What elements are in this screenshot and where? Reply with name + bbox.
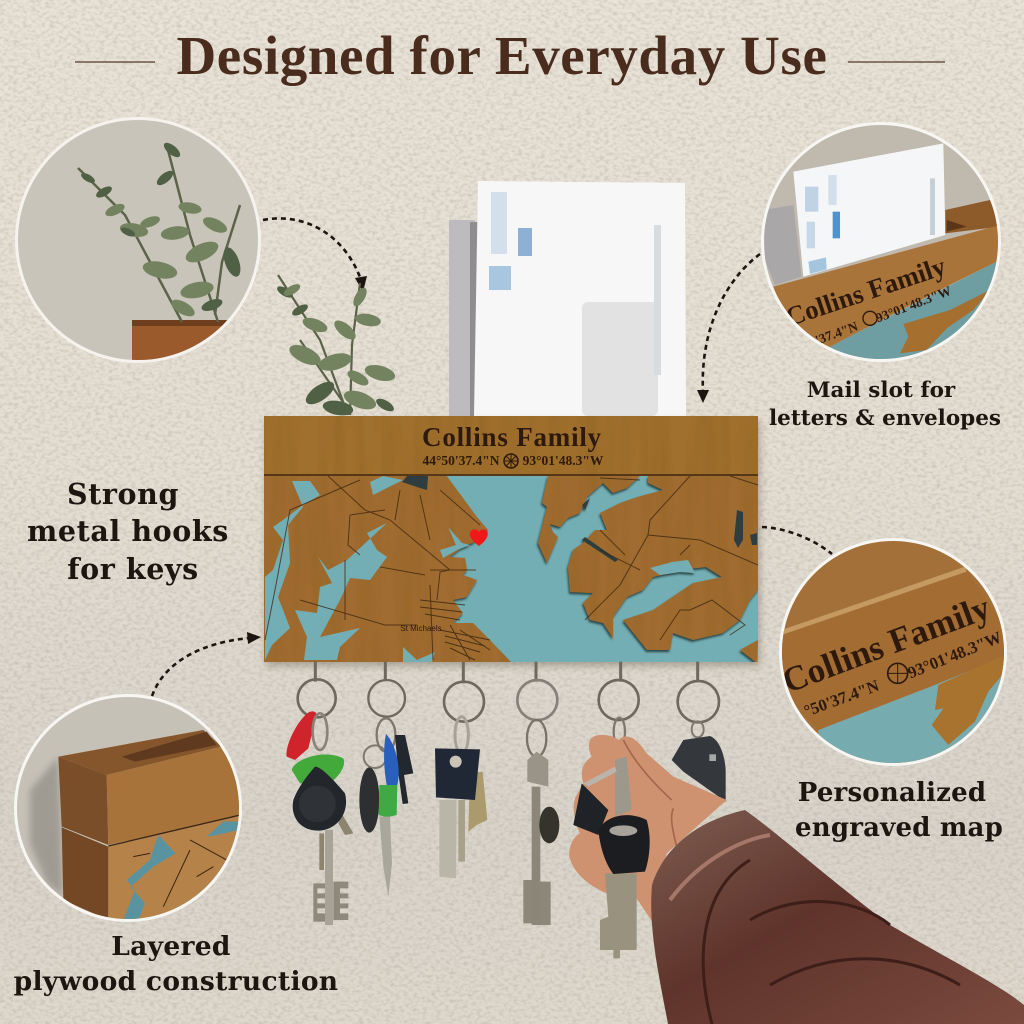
engraved name: detail: Collins Family <box>777 587 996 701</box>
title: Designed for Everyday Use <box>176 25 828 86</box>
panel: plywood detail circle <box>10 690 250 925</box>
engraved coordinates: 93°01'48.3"W <box>523 453 604 468</box>
engraved coordinates <box>422 453 604 468</box>
land and inlets <box>264 475 758 663</box>
engraved coordinates: detail: 93°01'48.3"W <box>905 627 1005 682</box>
panel: mail slot detail circle <box>760 120 1010 370</box>
engraved coordinates: mail slot <box>807 283 954 350</box>
hand holding keys <box>569 735 727 958</box>
panel: plant detail circle <box>15 117 261 363</box>
engraved coordinates: mail slot: 0'37.4"N <box>807 318 860 350</box>
panel: engraved map detail circle <box>775 535 1015 770</box>
arrow: hooks callout <box>152 632 261 696</box>
plant on wall <box>275 275 397 418</box>
label: metal hooks: metal hooks <box>27 514 229 548</box>
engraved coordinates: 44°50'37.4"N <box>422 453 500 468</box>
town label: St Michaels <box>400 624 442 633</box>
label: engraved map: Personalized <box>798 778 986 808</box>
key ring group 5 rings <box>599 662 639 746</box>
key ring group 4 <box>517 662 559 925</box>
engraved family name: Collins Family <box>422 422 602 452</box>
label: metal hooks: for keys <box>67 552 199 586</box>
label: metal hooks: Strong <box>67 477 179 511</box>
envelopes <box>449 181 686 417</box>
key ring group 2 <box>359 662 413 897</box>
icon: red heart pin <box>470 529 488 546</box>
arrow: engraved map callout <box>762 527 832 554</box>
wood header <box>264 416 758 476</box>
engraved name: mail slot: Collins Family <box>782 251 950 332</box>
label: mail slot: letters & envelopes <box>769 406 1001 431</box>
roads <box>265 476 758 660</box>
label: plywood: plywood construction <box>14 966 338 997</box>
label: mail slot: Mail slot for <box>807 378 956 403</box>
arrow: mail slot callout <box>697 254 760 403</box>
label: engraved map: engraved map <box>795 813 1003 843</box>
engraved coordinates: detail <box>801 627 1005 720</box>
label: plywood: Layered <box>111 931 231 962</box>
engraved coordinates: mail slot: 93°01'48.3"W <box>873 283 954 325</box>
town streets <box>420 600 490 660</box>
key ring group 3 <box>435 662 487 878</box>
key ring group 1 <box>287 662 353 925</box>
panel: map key holder <box>264 416 760 666</box>
key ring group 6 <box>672 662 726 802</box>
engraved coordinates: detail: °50'37.4"N <box>801 676 882 720</box>
map water <box>447 476 758 662</box>
arrow: plant callout <box>263 218 367 292</box>
hooks and keys <box>287 662 727 958</box>
inlets cut into land <box>265 476 695 662</box>
jacket sleeve <box>651 810 1024 1024</box>
